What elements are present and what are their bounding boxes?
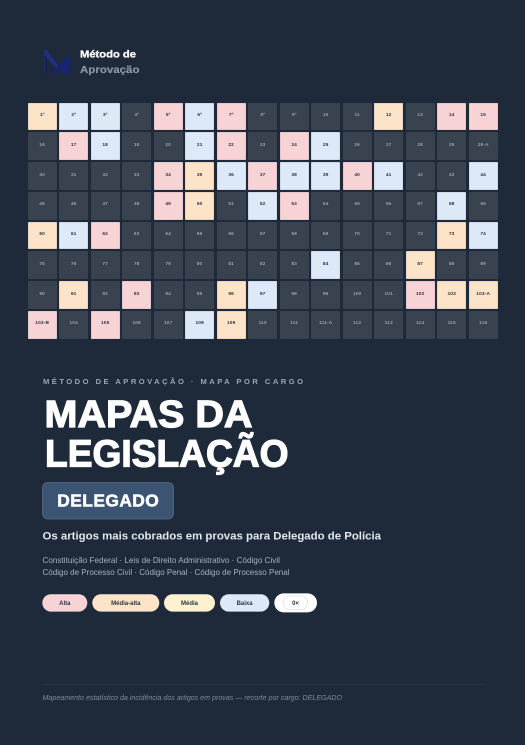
grid row 1: 12	[386, 113, 392, 118]
grid row 6: 78	[134, 262, 140, 267]
grid row 5: 67	[260, 232, 266, 237]
grid row 4: 46	[71, 202, 76, 207]
grid row 6: 85	[354, 262, 360, 267]
grid row 6: 80	[197, 262, 202, 267]
grid row 5: 70	[354, 232, 360, 237]
grid row 2: 21	[197, 143, 202, 148]
grid row 2: 25	[323, 143, 328, 148]
grid row 6: 89	[480, 262, 486, 267]
grid row 4: 45	[39, 202, 45, 207]
icon: logo M	[44, 49, 70, 74]
grid row 4: 49	[165, 202, 171, 207]
title: LEGISLAÇÃO	[45, 432, 288, 476]
grid row 2: 20	[165, 143, 171, 148]
grid row 4	[28, 192, 498, 220]
wordmark: Método de	[80, 49, 136, 61]
legend: Alta: Alta	[59, 601, 71, 607]
grid row 7: 103-A	[476, 292, 490, 297]
grid row 8: 104	[69, 321, 78, 326]
grid row 7: 98	[291, 292, 297, 297]
grid row 7	[28, 281, 498, 309]
legend: Média	[164, 594, 215, 612]
grid row 2: 17	[71, 143, 76, 148]
grid row 7: 97	[260, 292, 266, 297]
grid row 2: 16	[39, 143, 45, 148]
grid row 2: 29	[449, 143, 454, 148]
grid row 4: 53	[291, 202, 297, 207]
grid row 4: 52	[260, 202, 266, 207]
grid row 1: 13	[417, 113, 423, 118]
grid row 7: 96	[228, 292, 234, 297]
grid row 5: 60	[39, 232, 45, 237]
grid row 8: 115	[448, 321, 456, 326]
subject list	[42, 556, 290, 577]
grid row 2: 27	[386, 143, 392, 148]
grid row 5: 66	[228, 232, 234, 237]
grid row 5: 73	[449, 232, 454, 237]
grid row 6: 81	[228, 262, 234, 267]
wordmark: Aprovação	[80, 64, 140, 76]
grid row 4: 55	[354, 202, 360, 207]
legend: Média: Média	[181, 601, 199, 607]
grid row 3: 32	[102, 173, 108, 178]
grid row 4: 58	[449, 202, 454, 207]
grid row 2: 23	[260, 143, 266, 148]
grid row 4: 51	[228, 202, 234, 207]
badge: DELEGADO: DELEGADO	[57, 491, 159, 511]
grid row 1: 8º	[260, 113, 265, 118]
grid row 8: 116	[479, 321, 487, 326]
grid row 6	[28, 251, 498, 279]
grid row 1: 10	[323, 113, 328, 118]
grid row 6: 84	[323, 262, 328, 267]
grid row 8: 113	[385, 321, 393, 326]
grid row 5: 68	[291, 232, 297, 237]
grid row 6: 87	[417, 262, 423, 267]
grid row 1: 4º	[134, 113, 139, 118]
grid row 6: 75	[39, 262, 45, 267]
grid row 2: 19	[134, 143, 140, 148]
legend: Média-alta	[92, 594, 159, 612]
grid row 7: 95	[197, 292, 202, 297]
grid row 8: 107	[164, 321, 172, 326]
grid row 6: 83	[291, 262, 297, 267]
grid row 2: 24	[291, 143, 297, 148]
grid row 8: 111-A	[319, 321, 332, 326]
grid row 3: 44	[480, 173, 486, 178]
grid row 4: 50	[197, 202, 202, 207]
grid row 1: 15	[480, 113, 486, 118]
grid row 5: 65	[197, 232, 202, 237]
grid row 4: 54	[323, 202, 328, 207]
grid row 7: 103	[447, 292, 456, 297]
grid row 7: 100	[353, 292, 361, 297]
grid row 8: 110	[259, 321, 267, 326]
grid row 4: 57	[417, 202, 423, 207]
grid row 3: 35	[197, 173, 202, 178]
grid row 3: 42	[417, 173, 423, 178]
grid row 3	[28, 162, 498, 190]
grid row 1: 2º	[71, 113, 76, 118]
subject list: Código de Processo Civil · Código Penal · Código de Processo Penal	[42, 568, 290, 577]
grid row 3: 38	[291, 173, 297, 178]
grid row 3: 31	[71, 173, 76, 178]
grid row 1: 1º	[40, 113, 45, 118]
footer rule	[43, 684, 484, 686]
grid row 7: 99	[323, 292, 328, 297]
grid row 2: 29-A	[478, 143, 489, 148]
legend	[42, 593, 317, 612]
grid row 7: 92	[102, 292, 108, 297]
grid row 1: 6º	[197, 113, 202, 118]
grid row 5: 72	[417, 232, 423, 237]
kicker: MÉTODO DE APROVAÇÃO · MAPA POR CARGO	[43, 377, 303, 386]
grid row 5	[28, 222, 498, 249]
grid row 8: 106	[132, 321, 141, 326]
grid row 1: 11	[354, 113, 360, 118]
grid row 7: 93	[134, 292, 140, 297]
grid row 8: 114	[416, 321, 424, 326]
legend: 0×	[274, 593, 317, 612]
grid row 5: 63	[134, 232, 140, 237]
title: MAPAS DA	[44, 394, 252, 436]
grid row 8: 105	[101, 321, 109, 326]
grid row 2: 18	[102, 143, 108, 148]
grid row 4: 48	[134, 202, 140, 207]
wordmark	[80, 49, 140, 76]
grid row 3: 43	[449, 173, 454, 178]
grid row 8: 111	[290, 321, 298, 326]
grid row 3: 30	[39, 173, 45, 178]
badge: DELEGADO	[42, 482, 174, 519]
grid row 3: 40	[354, 173, 360, 178]
grid row 3: 41	[386, 173, 392, 178]
grid row 5: 61	[71, 232, 76, 237]
grid row 6: 76	[71, 262, 76, 267]
grid row 6: 82	[260, 262, 266, 267]
legend: Média-alta: Média-alta	[111, 601, 141, 607]
grid row 2: 26	[354, 143, 360, 148]
grid row 1: 7º	[229, 113, 234, 118]
grid row 7: 91	[71, 292, 76, 297]
grid row 8: 112	[353, 321, 361, 326]
grid row 8: 108	[195, 321, 204, 326]
grid row 5: 64	[165, 232, 171, 237]
grid row 1: 5º	[166, 113, 171, 118]
grid row 8	[28, 311, 498, 339]
grid row 7: 102	[416, 292, 424, 297]
grid row 1: 14	[449, 113, 454, 118]
grid row 5: 62	[102, 232, 108, 237]
grid row 1: 9º	[292, 113, 297, 118]
article heatmap grid	[28, 103, 498, 339]
title	[44, 394, 288, 476]
grid row 3: 39	[323, 173, 328, 178]
grid row 1	[28, 103, 498, 130]
grid row 3: 33	[134, 173, 140, 178]
grid row 1: 3º	[103, 113, 108, 118]
grid row 6: 86	[386, 262, 392, 267]
grid row 4: 47	[102, 202, 108, 207]
grid row 8: 103-B	[35, 321, 49, 326]
grid row 5: 69	[323, 232, 328, 237]
grid row 5: 74	[480, 232, 486, 237]
grid row 4: 59	[480, 202, 486, 207]
legend: Baixa: Baixa	[237, 601, 253, 607]
grid row 2	[28, 132, 498, 160]
grid row 7: 101	[384, 292, 393, 297]
grid row 2: 22	[228, 143, 234, 148]
grid row 6: 79	[165, 262, 171, 267]
grid row 5: 71	[386, 232, 392, 237]
grid row 3: 37	[260, 173, 266, 178]
footer note: Mapeamento estatístico da incidência dos artigos em provas — recorte por cargo: DELEGADO	[42, 695, 343, 702]
legend: Alta	[42, 594, 87, 612]
grid row 2: 28	[417, 143, 423, 148]
grid row 6: 77	[102, 262, 108, 267]
subtitle: Os artigos mais cobrados em provas para Delegado de Polícia	[42, 530, 382, 542]
grid row 8: 109	[227, 321, 235, 326]
grid row 7: 94	[165, 292, 171, 297]
grid row 4: 56	[386, 202, 392, 207]
grid row 3: 36	[228, 173, 234, 178]
grid row 3: 34	[165, 173, 171, 178]
legend: Baixa	[220, 594, 269, 612]
grid row 7: 90	[39, 292, 45, 297]
legend: 0×: 0×	[292, 601, 299, 607]
subject list: Constituição Federal · Leis de Direito Administrativo · Código Civil	[42, 556, 280, 565]
grid row 6: 88	[449, 262, 454, 267]
